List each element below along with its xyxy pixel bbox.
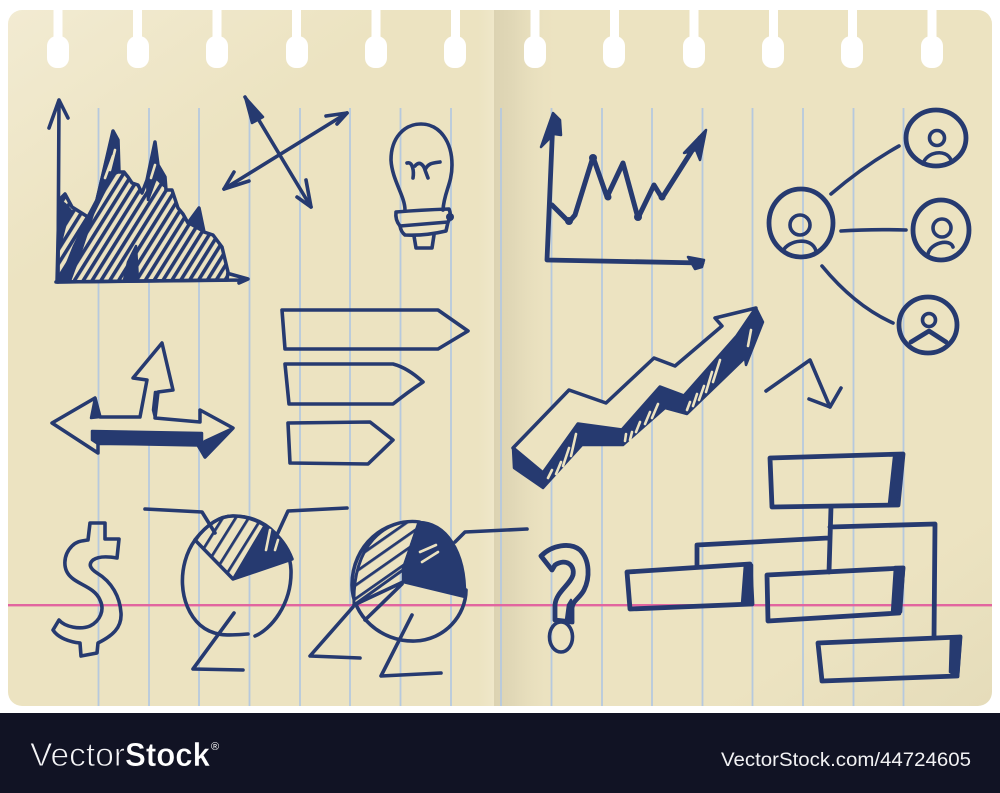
- image id: VectorStock.com/44724605: [721, 750, 971, 771]
- long label: [282, 310, 468, 349]
- line chart: [541, 113, 706, 269]
- signpost labels: [282, 310, 468, 464]
- short label: [288, 422, 393, 464]
- medium label: [285, 364, 423, 404]
- central person: [769, 189, 833, 257]
- binder holes: [47, 10, 943, 68]
- hatched area chart: [49, 100, 248, 283]
- pie chart two: [310, 522, 527, 676]
- bottom person: [899, 297, 957, 353]
- bottom box: [818, 636, 961, 681]
- light bulb: [391, 124, 454, 248]
- people network: [769, 110, 969, 353]
- crossed double arrows: [224, 97, 347, 207]
- footer bar: Stock: [125, 736, 211, 773]
- top box: [770, 454, 903, 507]
- question mark: [541, 545, 588, 652]
- T junction arrow: [52, 343, 233, 457]
- pie chart one: [145, 508, 347, 670]
- left box: [627, 564, 752, 609]
- rising 3D arrow: [513, 308, 763, 488]
- small bent arrow: [766, 360, 841, 407]
- middle box: [767, 567, 904, 621]
- middle person: [913, 200, 969, 260]
- organisation chart: [627, 454, 961, 681]
- logo wordmark: Vector: [30, 736, 125, 773]
- top person: [906, 110, 966, 166]
- connectors: [697, 507, 935, 638]
- footer bar: ®: [211, 741, 219, 753]
- footer bar: [0, 713, 1000, 793]
- dollar sign: [53, 523, 121, 656]
